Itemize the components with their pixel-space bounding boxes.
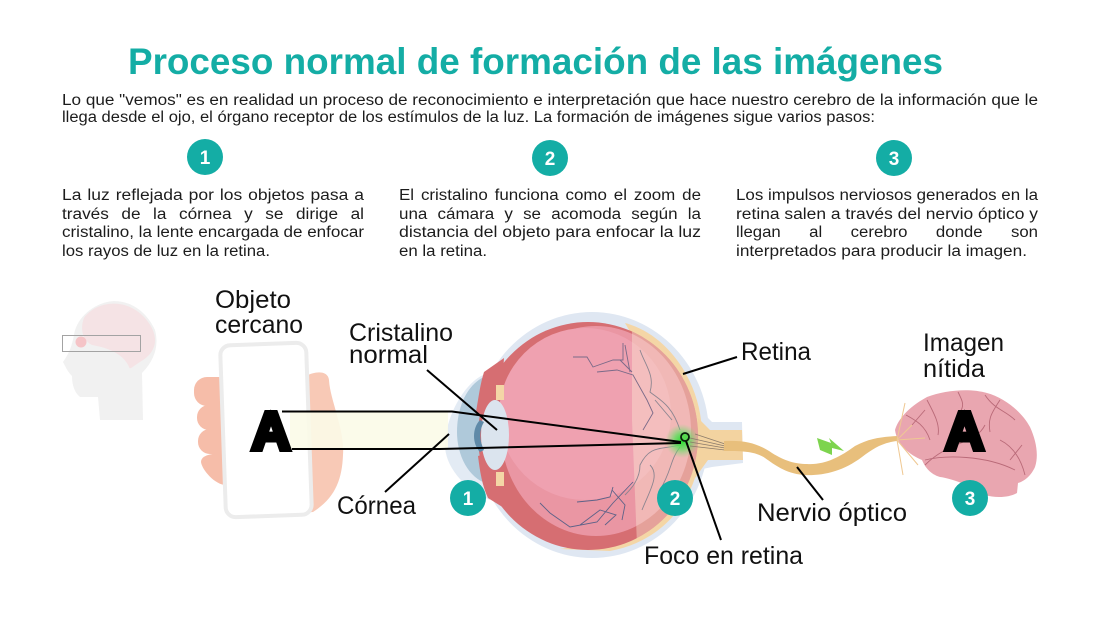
step 3 text <box>736 187 1038 260</box>
label: foco en retina: Foco en retina <box>644 542 803 570</box>
step 2 badge: 2 <box>545 149 555 170</box>
step 1 badge: 1 <box>200 148 211 169</box>
marker 3 <box>952 480 988 516</box>
sclera yellow layer <box>560 323 743 551</box>
intro text: Lo que "vemos" es en realidad un proceso de reconocimiento e interpretación que hace nuestro cerebro de la información que le <box>62 92 1038 109</box>
step 1 text <box>62 187 364 260</box>
icon: hand <box>194 372 343 514</box>
marker 1 <box>450 480 486 516</box>
pointer: cornea <box>385 434 449 492</box>
step 1 text: través de la córnea y se dirige al <box>62 206 364 223</box>
marker 2 <box>657 480 693 516</box>
cornea <box>457 376 488 484</box>
lens focus glow <box>665 424 699 458</box>
label: cristalino normal: normal <box>349 341 428 369</box>
eye outer layer with nerve sheath <box>445 312 743 558</box>
light beam <box>290 412 448 449</box>
step 2 text: en la retina. <box>399 243 487 260</box>
step 1 badge <box>187 139 223 175</box>
label: retina: Retina <box>741 338 811 366</box>
label: imagen nitida <box>923 329 1004 383</box>
optic nerve <box>724 436 897 475</box>
step 2 badge <box>532 140 568 176</box>
step 3 badge <box>876 140 912 176</box>
label: cristalino normal: Cristalino <box>349 319 453 347</box>
letter A on brain: A <box>945 402 984 462</box>
step 2 text: una cámara y se acomoda según la <box>399 206 701 223</box>
step 2 text <box>399 187 701 260</box>
intro text <box>62 92 1038 126</box>
intro text: llega desde el ojo, el órgano receptor de los estímulos de la luz. La formación de imágenes sigue varios pasos: <box>62 109 875 126</box>
retinal vessels <box>540 343 680 527</box>
choroid ring <box>478 322 698 550</box>
optic nerve fibres <box>690 434 725 450</box>
icon: lightning <box>817 438 844 455</box>
inner globe <box>500 326 698 538</box>
step 2 text: El cristalino funciona como el zoom de <box>399 187 701 204</box>
label: imagen nitida: nítida <box>923 355 985 383</box>
step 3 text: Los impulsos nerviosos generados en la <box>736 187 1038 204</box>
marker 1: 1 <box>463 489 474 510</box>
eye anatomy <box>445 312 743 558</box>
marker 3: 3 <box>965 489 975 510</box>
marker 2: 2 <box>670 489 680 510</box>
pointer: cristalino <box>427 370 497 430</box>
light rays <box>282 412 681 449</box>
label: objeto cercano: cercano <box>215 311 303 339</box>
step 3 text: interpretados para producir la imagen. <box>736 243 1027 260</box>
step 3 text: llegan al cerebro donde son <box>736 224 1038 241</box>
label: cornea: Córnea <box>337 492 416 520</box>
brain <box>895 390 1037 497</box>
pointer: retina <box>683 357 737 374</box>
iris and lens <box>474 358 509 508</box>
title: Proceso normal de formación de las imágenes <box>128 41 943 82</box>
label: nervio optico: Nervio óptico <box>757 499 907 527</box>
icon: phone <box>220 343 312 517</box>
step 3 badge: 3 <box>889 149 899 170</box>
label: cristalino normal <box>349 319 453 369</box>
step 3 text: retina salen a través del nervio óptico y <box>736 206 1038 223</box>
pointer: optic nerve <box>797 467 823 500</box>
step 1 text: La luz reflejada por los objetos pasa a <box>62 187 364 204</box>
step 1 text: los rayos de luz en la retina. <box>62 243 270 260</box>
step 2 text: distancia del objeto para enfocar la luz <box>399 224 701 241</box>
letter A on phone: A <box>252 402 290 462</box>
icon: head with brain <box>62 301 156 420</box>
label: objeto cercano <box>215 286 303 339</box>
pointer: focus <box>686 441 721 540</box>
label: imagen nitida: Imagen <box>923 329 1004 357</box>
focus ring <box>681 433 689 441</box>
label: objeto cercano: Objeto <box>215 286 291 314</box>
step 1 text: cristalino, la lente encargada de enfocar <box>62 224 364 241</box>
